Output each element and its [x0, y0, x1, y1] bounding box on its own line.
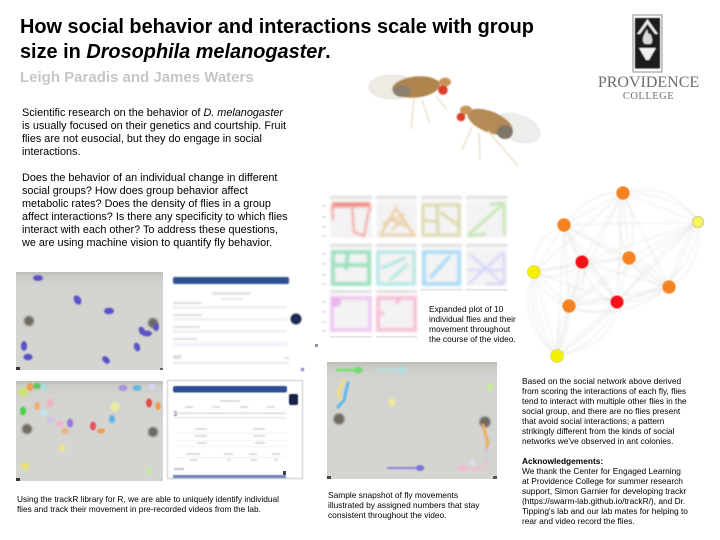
caption: sample snapshot: illustrated by assigned numbers that stay	[328, 500, 479, 510]
trail: green	[337, 368, 362, 372]
network node: upper left orange	[558, 218, 570, 232]
caption: trackR library: flies and track their movement in pre-recorded videos from the lab.	[17, 504, 261, 514]
network node: top orange	[616, 186, 630, 200]
panel: fly 5 track	[330, 244, 372, 286]
image: two fruit flies	[369, 74, 544, 166]
network edges	[528, 190, 699, 356]
plot axis ticks	[322, 205, 507, 338]
video frame: tracked flies, unique colours	[16, 381, 163, 481]
logo wordmark: PROVIDENCE	[598, 74, 699, 91]
text block: introduction	[22, 107, 288, 249]
caption: sample snapshot: Sample snapshot of fly movements	[328, 490, 458, 500]
caption: trackR library: Using the trackR library for R, we are able to uniquely identify individual	[17, 494, 279, 504]
software panel: settings form	[173, 277, 304, 371]
text block: social network and acknowledgements: We thank the Center for Engaged Learning	[522, 466, 681, 476]
fly: upper left	[369, 74, 451, 129]
network graph: social interactions	[528, 186, 704, 362]
text block: social network and acknowledgements: rear and video record the flies.	[522, 516, 635, 526]
plot grid: individual fly movement	[315, 196, 507, 347]
text block: social network and acknowledgements: strikingly different from the kinds of social	[522, 426, 674, 436]
text block: introduction: Scientific research on the behavior of D. melanogaster	[22, 107, 283, 119]
panel: fly 7 track	[421, 244, 462, 286]
panel: fly 10 track	[376, 290, 417, 332]
text block: introduction: metabolic rates? Does the density of flies in a group	[22, 198, 271, 210]
panel: fly 1 track	[330, 196, 372, 238]
trail: orange	[483, 425, 488, 449]
software panel: tracking form	[168, 380, 302, 478]
text block: social network and acknowledgements: Acknowledgements:	[522, 456, 603, 466]
caption: expanded plot	[429, 304, 516, 344]
panel: fly 4 track	[466, 196, 507, 238]
panel: fly 9 track	[330, 290, 372, 332]
text block: social network and acknowledgements: support, Simon Garnier for developing trackr	[522, 486, 686, 496]
caption: trackR library	[17, 494, 279, 514]
caption: sample snapshot: consistent throughout the video.	[328, 510, 447, 520]
text block: social network and acknowledgements: Based on the social network above derived	[522, 376, 681, 386]
panel: fly 2 track	[376, 196, 417, 238]
network node: central red	[576, 256, 588, 268]
text block: introduction: affect interactions? Is there any specificity to which flies	[22, 211, 288, 223]
text block: social network and acknowledgements: from scoring the interactions of each fly, flies	[522, 386, 686, 396]
logo wordmark: COLLEGE	[623, 91, 674, 102]
text block: introduction: Does the behavior of an individual change in different	[22, 172, 277, 184]
text block: introduction: social groups? How does group behavior affect	[22, 185, 248, 197]
text block: social network and acknowledgements: Tipping's lab and our lab mates for helping to	[522, 506, 688, 516]
title: How social behavior and interactions scale with group	[20, 16, 534, 38]
logo wordmark	[598, 74, 699, 102]
network node: bottom yellow	[550, 350, 564, 362]
text block: social network and acknowledgements: at Providence College for summer research	[522, 476, 683, 486]
text block: social network and acknowledgements: that avoid social interactions; a pattern	[522, 416, 664, 426]
network node: far left yellow	[528, 266, 540, 278]
network node: lower left orange	[562, 300, 576, 312]
network node: lower red	[610, 296, 624, 308]
caption: expanded plot: the course of the video.	[429, 334, 516, 344]
trail: pale teal	[377, 369, 402, 371]
title: size in Drosophila melanogaster.	[20, 41, 331, 63]
crest: flame	[643, 29, 652, 44]
text block: introduction: interactions.	[22, 146, 80, 158]
crest: gothic arch	[637, 19, 658, 34]
trail: blue	[338, 383, 348, 407]
fly: lower right	[457, 103, 544, 166]
caption: expanded plot: Expanded plot of 10	[429, 304, 503, 314]
caption: expanded plot: individual flies and their	[429, 314, 516, 324]
text block: social network and acknowledgements: tend to interact with multiple other flies in the	[522, 396, 687, 406]
network node: right orange	[662, 280, 676, 294]
text block: introduction: is usually focused on their genetics and courtship. Fruit	[22, 120, 286, 132]
trail: pink	[460, 461, 486, 469]
crest: chalice	[639, 48, 656, 60]
caption: expanded plot: movement throughout	[429, 324, 510, 334]
trail: purple	[388, 467, 423, 469]
text block: social network and acknowledgements: (https://swarm-lab.github.io/trackR/), and Dr.	[522, 496, 685, 506]
panel: fly 8 track	[466, 244, 507, 286]
logo: Providence College crest	[633, 15, 662, 72]
network node: central orange	[622, 252, 636, 264]
trail: lavender	[486, 449, 487, 463]
text block: introduction: interact with each other? To address these questions,	[22, 224, 278, 236]
authors: Leigh Paradis and James Waters	[20, 69, 254, 86]
text block: social network and acknowledgements: social group, and there are no flies present	[522, 406, 680, 416]
network node: far right yellow	[692, 216, 704, 228]
title	[20, 16, 534, 63]
text block: social network and acknowledgements	[522, 376, 688, 526]
trail: yellow	[338, 380, 344, 402]
text block: introduction: we are using machine vision to quantify fly behavior.	[22, 237, 272, 249]
video frame: movement trails	[327, 362, 497, 479]
text block: social network and acknowledgements: networks we've observed in ant colonies.	[522, 436, 673, 446]
caption: sample snapshot	[328, 490, 480, 520]
panel: fly 6 track	[376, 244, 417, 286]
text block: introduction: flies are not eusocial, but they do engage in social	[22, 133, 262, 145]
video frame: tracked flies, single colour	[16, 272, 163, 370]
panel: fly 3 track	[421, 196, 462, 238]
